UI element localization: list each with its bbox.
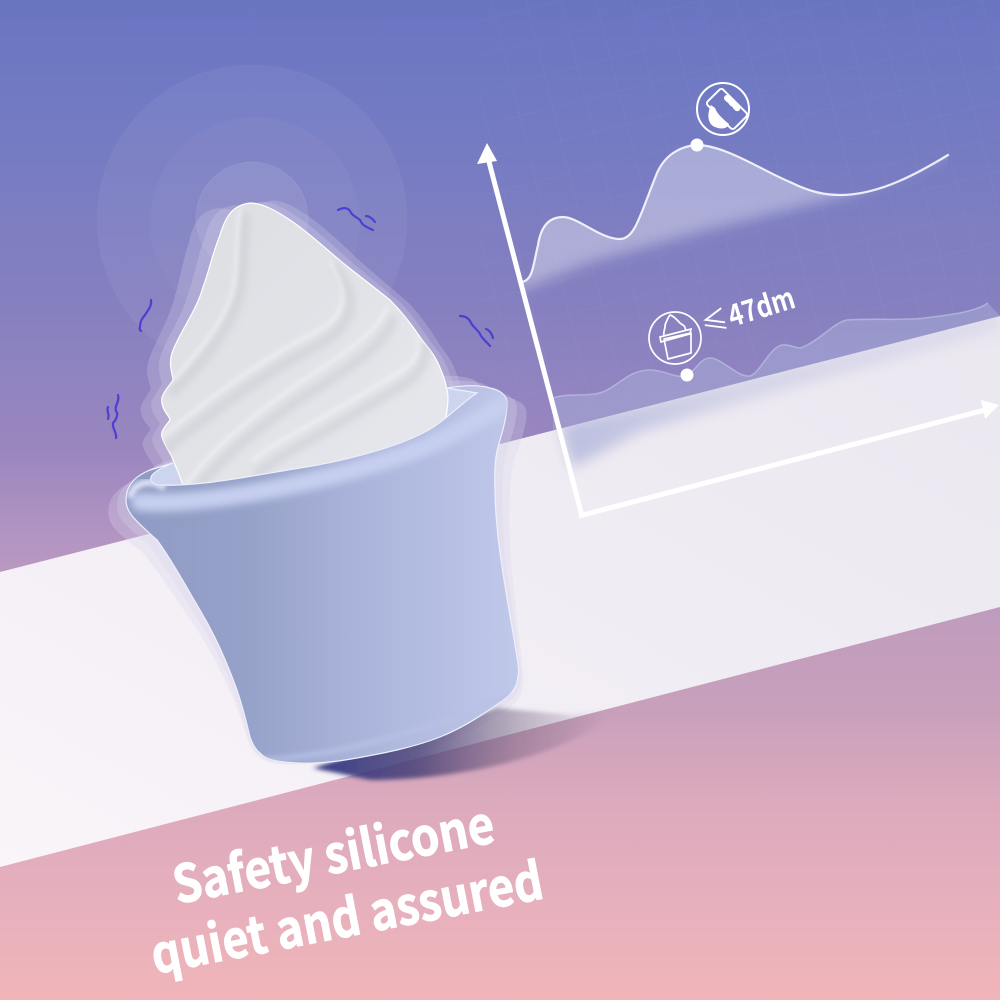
peak dot	[690, 138, 704, 152]
less-or-equal sign: ≤	[696, 297, 732, 342]
cup rim left end highlight	[130, 483, 165, 498]
icon: hand holding phone	[697, 83, 749, 135]
headline line 1: Safety silicone	[166, 783, 500, 919]
lower dot	[680, 368, 694, 382]
cast shadow on band	[313, 708, 612, 780]
white diagonal band	[0, 316, 1000, 867]
cup shading	[130, 405, 510, 760]
vibration squiggles	[107, 208, 493, 438]
swirl ridges	[162, 210, 426, 496]
lower curve line	[553, 303, 988, 398]
product: white swirl	[162, 203, 448, 498]
chart	[477, 83, 1000, 516]
background grid	[480, 0, 1000, 440]
product: cup body	[126, 386, 519, 763]
x axis arrow	[579, 400, 999, 516]
vibration echo halos around swirl	[129, 196, 471, 508]
headline line 2: quiet and assured	[144, 839, 549, 989]
upper curve line	[522, 145, 948, 282]
headline	[144, 783, 549, 989]
upper curve area	[524, 146, 948, 294]
cup rim highlight	[140, 405, 503, 503]
lower curve area	[553, 303, 1000, 430]
y axis arrow	[477, 143, 582, 516]
vibration ripples	[97, 65, 407, 375]
icon: cup outline	[649, 312, 701, 364]
cup bottom lip shade	[262, 695, 510, 760]
product: cup back rim	[126, 386, 507, 520]
47dm label: 47dm	[722, 274, 800, 336]
band soft shading under chart	[560, 312, 1000, 468]
vibration echo halos around cup	[100, 373, 539, 777]
